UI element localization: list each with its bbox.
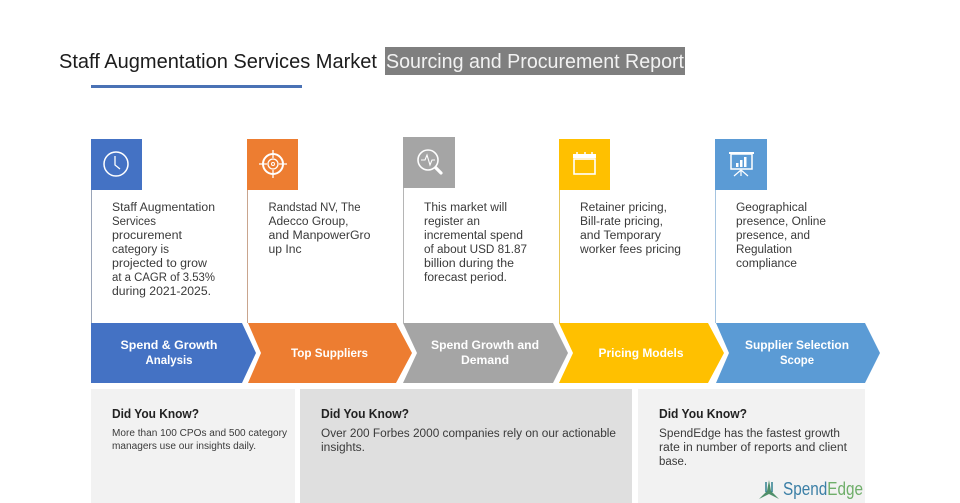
text: spend growth: of about USD 81.87 [424, 244, 527, 256]
text: top suppliers: Randstad NV, The [268, 202, 360, 214]
panel: did you know 3: Did You Know? [659, 407, 747, 421]
icon: presentation board [715, 139, 767, 190]
panel: top suppliers [247, 139, 412, 383]
text: spend and growth: Services [112, 216, 156, 228]
text: pricing models: Retainer pricing, [580, 202, 667, 214]
text: top suppliers: and ManpowerGro [268, 230, 370, 242]
arrow: spend growth and demand: Demand [461, 353, 509, 367]
text: spend growth: register an [424, 216, 480, 228]
text: pricing models [579, 202, 681, 256]
text: spend and growth: category is [112, 244, 169, 256]
icon: magnifier [403, 137, 455, 188]
panel: did you know 1: Did You Know? [112, 407, 199, 421]
arrow: spend growth and demand: Spend Growth and [431, 338, 539, 352]
text: spend and growth: procurement [112, 230, 183, 242]
text: pricing models: Bill-rate pricing, [580, 216, 663, 228]
panel: pricing models [559, 139, 724, 383]
panel: supplier selection scope [715, 139, 880, 383]
panel: did you know 2: Over 200 Forbes 2000 companies rely on our actionable [321, 428, 616, 440]
arrow: supplier selection scope [716, 323, 880, 383]
panel: did you know 1: managers use our insights daily. [112, 441, 256, 452]
text: supplier selection: Geographical [736, 202, 807, 214]
panel: did you know 2: insights. [321, 442, 365, 454]
arrow: top suppliers: Top Suppliers [291, 346, 368, 360]
panel: did you know 3: base. [659, 456, 687, 468]
arrow: supplier selection scope: Supplier Selection [745, 338, 849, 352]
icon: clock [91, 139, 142, 190]
icon: target [247, 139, 298, 190]
text: spend growth: forecast period. [424, 272, 507, 284]
text: top suppliers: Adecco Group, [268, 216, 348, 228]
text: pricing models: worker fees pricing [579, 244, 681, 256]
panel: did you know 3: SpendEdge has the fastest growth [659, 428, 840, 440]
title: Staff Augmentation Services Market [59, 51, 377, 73]
panel: spend growth and demand [403, 137, 568, 383]
text: spend and growth: during 2021-2025. [112, 286, 211, 298]
arrow: spend and growth analysis: Spend & Growth [120, 338, 218, 352]
text: supplier selection: Regulation [736, 244, 792, 256]
panel: did you know 3 [638, 389, 865, 503]
panel: did you know 2 [300, 389, 632, 503]
text: spend and growth: Staff Augmentation [112, 202, 215, 214]
arrow: spend and growth analysis [91, 323, 256, 383]
panel: did you know 3: rate in number of reports and client [659, 442, 848, 454]
text: spend and growth: at a CAGR of 3.53% [112, 272, 215, 284]
text: spend and growth: projected to grow [112, 258, 208, 270]
panel: did you know 1 [91, 389, 295, 503]
text: spend growth [424, 202, 527, 284]
text: supplier selection: presence, Online [736, 216, 826, 228]
icon: calendar [559, 139, 610, 190]
text: supplier selection: compliance [736, 258, 797, 270]
text: spend and growth [112, 202, 215, 298]
arrow: pricing models [559, 323, 724, 383]
arrow: pricing models: Pricing Models [598, 346, 684, 360]
title: Sourcing and Procurement Report [386, 51, 684, 73]
text: spend growth: incremental spend [424, 230, 523, 242]
text: spend growth: This market will [424, 202, 507, 214]
text: top suppliers: up Inc [268, 244, 302, 256]
panel: did you know 2: Did You Know? [321, 407, 409, 421]
logo: SpendEdge: SpendEdge [783, 479, 863, 499]
arrow: supplier selection scope: Scope [780, 353, 814, 367]
title [59, 47, 685, 75]
panel: spend and growth analysis [91, 139, 256, 383]
arrow: spend and growth analysis: Analysis [146, 353, 193, 367]
text: top suppliers [268, 202, 370, 256]
text: pricing models: and Temporary [580, 230, 661, 242]
text: supplier selection [736, 202, 826, 270]
title underline [91, 85, 302, 88]
text: spend growth: billion during the [424, 258, 514, 270]
panel: did you know 1: More than 100 CPOs and 500 category [112, 428, 287, 439]
arrow: top suppliers [248, 323, 412, 383]
arrow: spend growth and demand [403, 323, 568, 383]
text: supplier selection: presence, and [736, 230, 810, 242]
